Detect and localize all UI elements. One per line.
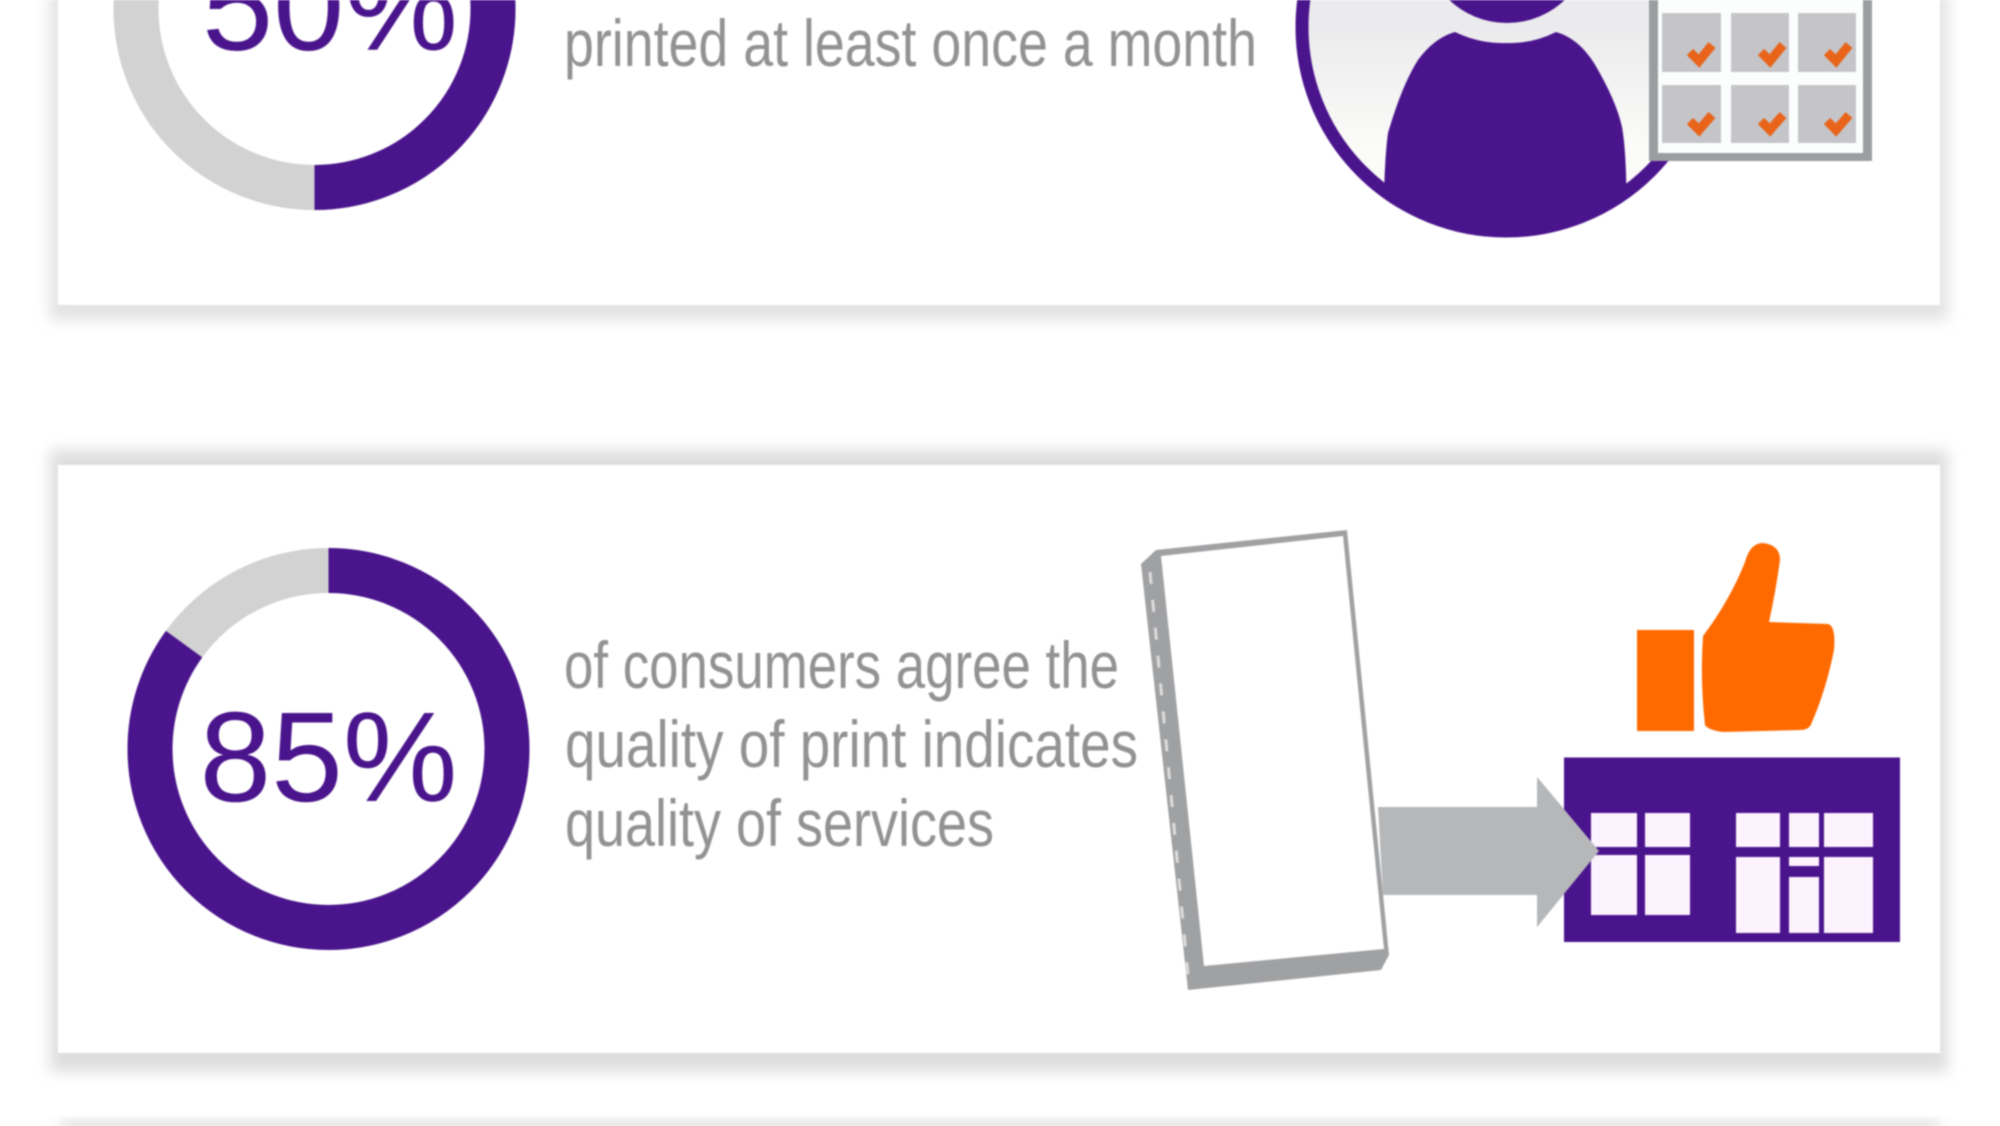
icon: printed booklet <box>1141 530 1389 990</box>
text: printed at least once a month: printed at least once a month <box>564 6 1257 80</box>
text: consumers agree quality of print indicates quality of services: quality of print indicates <box>565 707 1138 781</box>
panel: monthly print statistic <box>50 0 1948 320</box>
icon: storefront building <box>1564 758 1900 942</box>
panel: print quality statistic <box>50 450 1948 1072</box>
panel: next statistic top edge <box>60 1122 1940 1126</box>
arrow: print to business <box>1378 777 1599 927</box>
icon: calendar <box>1649 0 1872 161</box>
donut chart: 85% <box>150 570 507 928</box>
donut chart: 50% <box>136 0 493 188</box>
icon: person with calendar <box>1302 0 1872 245</box>
donut chart: 85%: 85% <box>200 686 458 829</box>
text: consumers agree quality of print indicates quality of services: of consumers agree the <box>564 628 1119 702</box>
text: consumers agree quality of print indicates quality of services: quality of services <box>565 786 994 860</box>
text: consumers agree quality of print indicates quality of services <box>564 628 1138 860</box>
icon: thumbs up <box>1637 543 1834 732</box>
arrow head overlapping building <box>1537 777 1599 927</box>
